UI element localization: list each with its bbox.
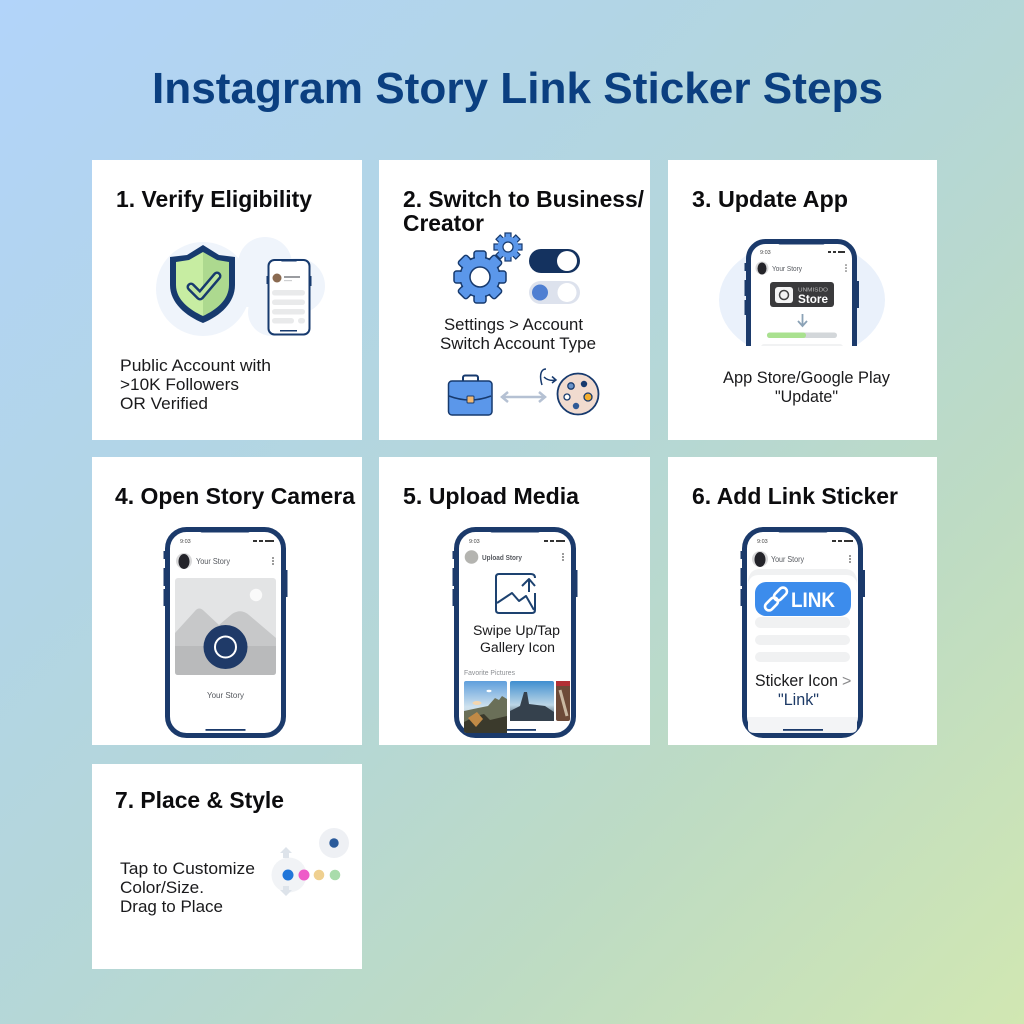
progress bar — [767, 332, 837, 338]
image placeholder — [175, 578, 276, 675]
button: link sticker: LINK — [791, 589, 835, 612]
text: customize instructions: Tap to Customize — [120, 860, 255, 878]
heading: step 3: 3. Update App — [692, 186, 848, 212]
heading: step 4: 4. Open Story Camera — [115, 483, 356, 509]
icon: color picker — [272, 828, 349, 896]
phone: app store update: 9:03 — [760, 250, 771, 256]
text: update instructions: App Store/Google Play — [723, 369, 891, 387]
text: update instructions: "Update" — [775, 388, 838, 406]
gallery photos — [464, 681, 570, 733]
icon: small phone with profile — [266, 259, 312, 334]
arrow: curved — [541, 369, 556, 385]
text: swipe instructions: Swipe Up/Tap — [473, 623, 560, 639]
icon: gallery upload — [496, 574, 535, 613]
phone: upload media: 9:03 — [469, 539, 480, 545]
phone: story camera: Your Story — [207, 690, 245, 700]
placeholder rows — [755, 617, 850, 662]
panel: step 2 switch to business or creator — [379, 160, 650, 440]
icon: shield with check — [170, 245, 235, 323]
heading: step 1: 1. Verify Eligibility — [116, 186, 312, 212]
text: swipe instructions: Gallery Icon — [480, 640, 555, 656]
icon: background circle — [719, 255, 885, 345]
icon: palette — [558, 374, 598, 414]
heading: step 2 — [403, 186, 644, 236]
text: swipe instructions — [473, 623, 560, 656]
panel: step 6 add link sticker — [668, 457, 937, 745]
badge: store: Store — [798, 292, 828, 306]
text: sticker instruction: > — [842, 673, 851, 690]
phone: link sticker: 9:03 — [757, 539, 768, 545]
panel: step 3 update app — [668, 160, 937, 440]
title: Instagram Story Link Sticker Steps — [152, 65, 883, 113]
panel: step 7 place and style — [92, 764, 362, 969]
phone: story camera — [164, 527, 288, 736]
text: customize instructions: Color/Size. — [120, 879, 204, 897]
icon: toggle off — [529, 281, 580, 304]
phone: story camera: 9:03 — [180, 539, 191, 545]
icon: toggle on — [529, 249, 580, 273]
heading: step 5: 5. Upload Media — [403, 483, 580, 509]
phone: story camera: Your Story — [196, 556, 231, 566]
phone: app store update: Your Story — [772, 264, 802, 273]
panel: step 4 open story camera — [92, 457, 362, 745]
text: sticker instruction — [755, 672, 851, 709]
arrow: two-way switch — [502, 392, 545, 402]
text: customize instructions — [120, 860, 255, 916]
badge: store — [770, 282, 834, 307]
text: update instructions — [723, 369, 891, 406]
phone: link sticker: Your Story — [771, 554, 805, 564]
icon: chain link — [763, 586, 789, 612]
phone: link sticker — [740, 527, 865, 736]
text: eligibility requirements — [120, 357, 271, 413]
heading: step 2: Creator — [403, 210, 484, 236]
button: link sticker — [755, 582, 851, 616]
badge: store: UNMISDO — [798, 288, 828, 294]
icon: large gear — [454, 251, 506, 303]
panel: step 1 verify eligibility — [92, 160, 362, 440]
text: eligibility requirements: >10K Followers — [120, 376, 239, 394]
icon: briefcase — [448, 376, 492, 415]
heading: step 2: 2. Switch to Business/ — [403, 186, 644, 212]
heading: step 6: 6. Add Link Sticker — [692, 483, 898, 509]
arrow: download — [798, 314, 807, 326]
text: customize instructions: Drag to Place — [120, 898, 223, 916]
text: settings path: Settings > Account — [444, 316, 583, 334]
icon: camera shutter — [204, 625, 248, 669]
icon: background blobs — [156, 237, 325, 336]
text: sticker instruction: "Link" — [778, 691, 819, 709]
text: eligibility requirements: Public Account with — [120, 357, 271, 375]
text: settings path: Switch Account Type — [440, 335, 596, 353]
icon: small gear — [494, 233, 522, 261]
heading: step 7: 7. Place & Style — [115, 787, 284, 813]
panel: step 5 upload media — [379, 457, 650, 745]
phone: upload media: Upload Story — [482, 553, 523, 562]
phone: upload media — [452, 527, 578, 736]
text: eligibility requirements: OR Verified — [120, 395, 208, 413]
phone: app store update — [744, 239, 859, 346]
text: settings path — [440, 316, 596, 353]
text: sticker instruction: Sticker Icon — [755, 672, 838, 690]
phone: upload media: Favorite Pictures — [464, 670, 515, 677]
